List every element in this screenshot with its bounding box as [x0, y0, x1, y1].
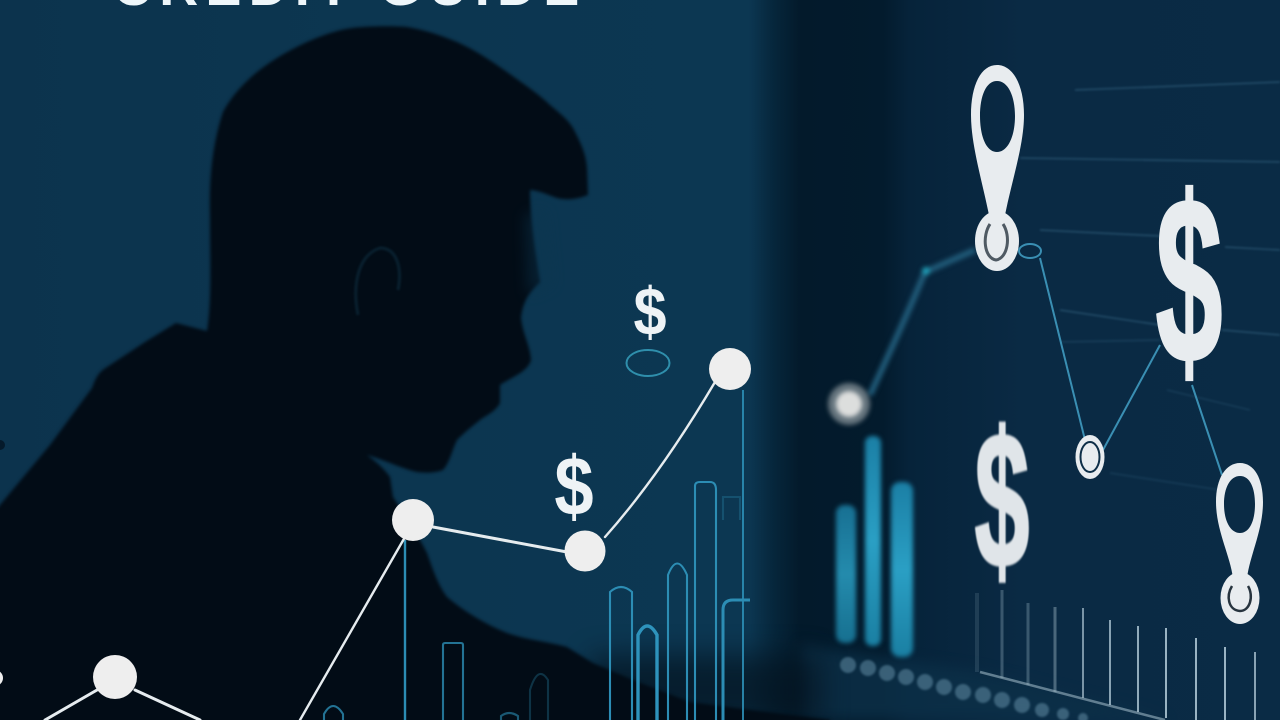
icon: map pin bottom — [1216, 463, 1263, 624]
forehead fade — [525, 210, 552, 295]
blue connector lines right — [1019, 244, 1222, 475]
blurred glowing node — [828, 383, 870, 425]
person silhouette — [0, 26, 830, 720]
icon: small dollar middle: $ — [554, 440, 594, 533]
dotted row on the floor — [840, 657, 1088, 720]
faint grid lines — [1020, 82, 1280, 490]
icon: ring node — [1076, 435, 1104, 479]
white line chart — [0, 348, 751, 720]
blurred dim vertical line — [932, 370, 938, 495]
icon: map pin top — [971, 65, 1024, 271]
left bar chart outlines — [324, 390, 750, 720]
icon: big dollar: $ — [1155, 148, 1223, 412]
tick lines right — [977, 590, 1255, 720]
ear shading — [356, 248, 399, 315]
icon: small ellipse under dollar — [626, 350, 670, 376]
small dark dot at left edge — [0, 440, 5, 450]
icon: small dollar top: $ — [633, 276, 667, 350]
blurred trend line — [870, 250, 975, 395]
icon: center dollar: $ — [975, 392, 1029, 609]
blurred bars right — [836, 436, 913, 657]
